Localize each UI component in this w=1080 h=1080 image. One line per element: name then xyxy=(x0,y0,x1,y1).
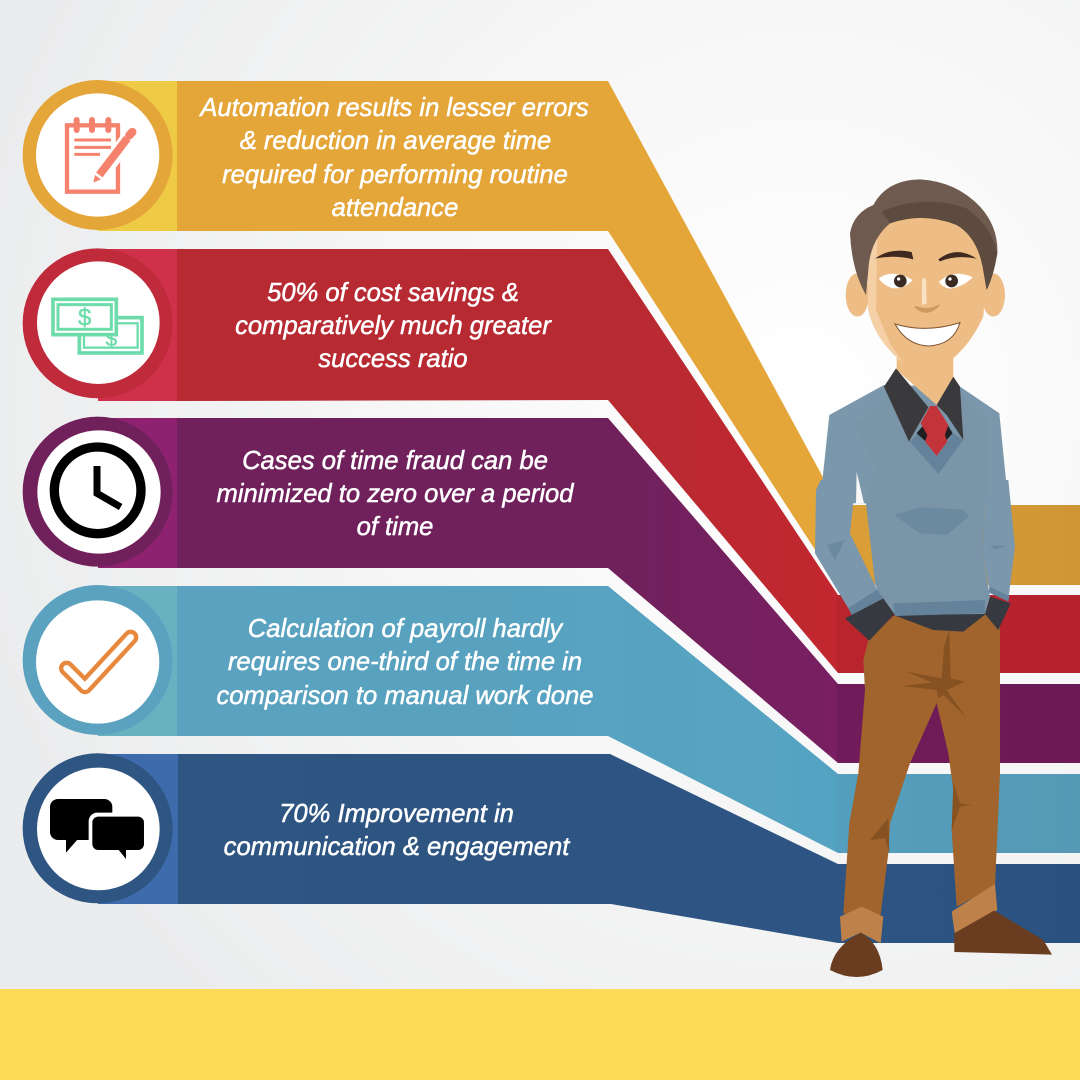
ribbon text: success ratio xyxy=(318,345,468,373)
icon: banknotes: $ xyxy=(78,304,91,331)
icon: clock xyxy=(23,417,173,567)
ribbon band xyxy=(177,249,1080,673)
ribbon text: communication & engagement xyxy=(224,833,570,861)
ribbon tab xyxy=(98,249,177,401)
ribbon band xyxy=(178,754,1080,943)
ribbon band xyxy=(177,418,1080,763)
panel: orange ribbon, fewer errors xyxy=(23,80,1080,585)
ribbon text: attendance xyxy=(332,194,458,222)
man: head and upper body xyxy=(820,179,1008,503)
ribbon tab xyxy=(98,586,177,736)
yellow footer band xyxy=(0,989,1080,1080)
ribbon text: 50% of cost savings & xyxy=(267,279,519,307)
illustration: smiling man in sweater xyxy=(815,179,1052,977)
ribbon text: comparatively much greater xyxy=(235,312,552,340)
ribbon text: of time xyxy=(357,513,433,541)
ribbon text: & reduction in average time xyxy=(240,127,551,155)
icon: chat bubbles xyxy=(23,753,173,903)
ribbon text xyxy=(224,800,570,861)
ribbon text: requires one-third of the time in xyxy=(228,648,582,676)
panel: purple ribbon, time fraud xyxy=(23,417,1080,763)
ribbon text: Calculation of payroll hardly xyxy=(248,615,564,643)
icon: notepad and pencil xyxy=(23,80,173,230)
icon: check mark xyxy=(23,585,173,735)
ribbon text: Automation results in lesser errors xyxy=(198,94,589,122)
ribbon text: 70% Improvement in xyxy=(279,800,514,828)
ribbon tab xyxy=(98,81,177,231)
panel: red ribbon, cost savings xyxy=(23,248,1080,673)
ribbon text xyxy=(235,279,552,373)
ribbon band xyxy=(177,81,1080,585)
ribbon text: minimized to zero over a period xyxy=(216,480,574,508)
panel: navy ribbon, communication xyxy=(23,753,1080,943)
ribbon text: Cases of time fraud can be xyxy=(242,447,548,475)
ribbon text xyxy=(198,94,589,222)
panel: teal ribbon, payroll xyxy=(23,585,1080,853)
icon: banknotes: $ xyxy=(106,328,118,351)
ribbon text: required for performing routine xyxy=(222,161,568,189)
ribbon tab xyxy=(98,418,177,568)
ribbon text xyxy=(216,447,574,541)
ribbon text xyxy=(216,615,594,710)
icon: banknotes xyxy=(23,248,173,398)
ribbon band xyxy=(177,586,1080,853)
ribbon tab xyxy=(98,754,178,904)
ribbon text: comparison to manual work done xyxy=(216,682,594,710)
man: trousers, shoes and lower sweater xyxy=(815,480,1052,977)
